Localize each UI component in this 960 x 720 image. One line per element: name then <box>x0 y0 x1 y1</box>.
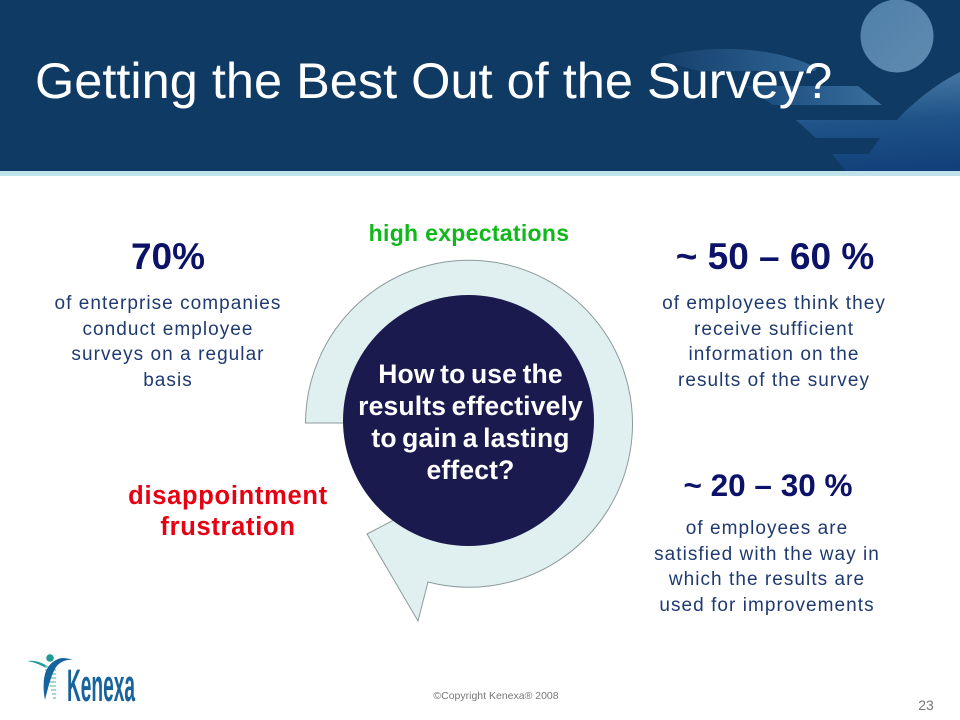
text: 50-60% description: information on the <box>688 344 860 365</box>
circular arrow <box>305 260 633 622</box>
center circle with question: How to use the <box>378 359 563 389</box>
logo: Kenexa <box>27 654 136 710</box>
text: 70% description: of enterprise companies <box>55 293 281 314</box>
stat: 50-60%: ~ 50 – 60 % <box>676 236 874 277</box>
label: disappointment frustration <box>128 482 328 541</box>
center circle with question: effect? <box>427 455 514 485</box>
text: 50-60% description <box>662 293 886 390</box>
center circle with question: results effectively <box>358 391 583 421</box>
text: 70% description <box>55 293 281 390</box>
center circle with question <box>343 295 594 546</box>
text: 50-60% description: of employees think they <box>662 293 886 314</box>
text: 70% description: basis <box>143 370 193 390</box>
text: 20-30% description: satisfied with the way in <box>654 544 880 564</box>
stat: 70%: 70% <box>131 236 205 277</box>
page number: 23 <box>918 697 934 713</box>
copyright footer: ©Copyright Kenexa® 2008 <box>433 690 559 702</box>
text: 20-30% description: which the results are <box>669 569 865 590</box>
text: 70% description: conduct employee <box>82 318 254 340</box>
stat: 20-30%: ~ 20 – 30 % <box>683 467 852 503</box>
text: 20-30% description: of employees are <box>686 518 848 539</box>
text: 70% description: surveys on a regular <box>71 344 265 365</box>
header banner <box>0 0 960 176</box>
label: disappointment frustration: disappointment <box>128 482 328 510</box>
center circle with question: to gain a lasting <box>371 423 570 453</box>
text: 20-30% description <box>654 518 880 616</box>
label: high expectations: high expectations <box>369 220 569 246</box>
text: 50-60% description: receive sufficient <box>694 318 854 340</box>
title: Getting the Best Out of the Survey? <box>35 52 832 109</box>
label: disappointment frustration: frustration <box>160 513 296 541</box>
text: 20-30% description: used for improvements <box>659 594 875 616</box>
text: 50-60% description: results of the survey <box>678 370 870 390</box>
